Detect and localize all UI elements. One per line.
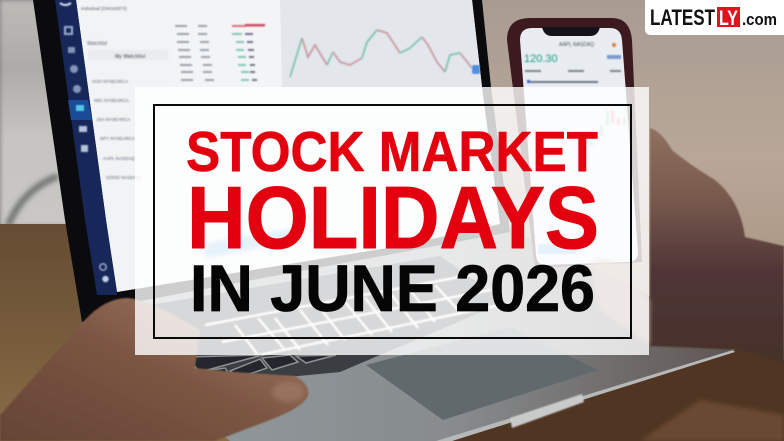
screen content behind panel: [203, 226, 304, 258]
title line 3: IN JUNE 2026: [190, 251, 595, 325]
title frame: [154, 105, 631, 338]
watchlist text: [81, 6, 168, 180]
laptop screen: [76, 0, 500, 292]
laptop front edge: [436, 350, 735, 441]
front latch: [510, 394, 584, 428]
wooden desk left: [0, 224, 260, 441]
watchlist text: Watchlist: [87, 41, 108, 47]
watchlist text: My Watchlist: [115, 54, 146, 60]
keyboard key gaps: [205, 275, 500, 358]
phone: [507, 18, 642, 268]
logo domain: .com: [742, 10, 777, 29]
wall background right: [480, 0, 784, 350]
wooden desk right: [450, 348, 784, 441]
logo red box: [717, 7, 740, 27]
title line 1: STOCK MARKET: [186, 120, 598, 184]
right hand: [650, 128, 784, 365]
keyboard dark: [150, 256, 505, 382]
watchlist text: DIA NYSEARCA: [97, 117, 130, 122]
phone candles: [590, 110, 626, 146]
laptop bezel: [33, 0, 510, 322]
laptop base deck: [118, 225, 733, 441]
watchlist text: VOO NYSEARCA: [92, 79, 128, 84]
chair curve: [8, 176, 58, 226]
keys visible below panel: [186, 355, 336, 381]
phone button: [538, 244, 576, 254]
sidebar icons: [60, 3, 109, 282]
price table rows: [175, 24, 265, 81]
left hand: [0, 298, 308, 441]
logo word: LATEST: [650, 5, 715, 30]
trackpad: [366, 327, 598, 420]
phone screen: [520, 28, 638, 265]
watchlist text: GOOG NASDAQ: [106, 175, 141, 180]
watchlist text: AAPL NASDAQ: [103, 156, 135, 161]
watchlist text: SPY NYSEARCA: [100, 136, 135, 141]
phone notch: [542, 27, 600, 36]
phone header text: AAPL NASDAQ: [559, 42, 594, 48]
title line 2: HOLIDAYS: [187, 168, 599, 267]
blue chart marker: [472, 65, 480, 74]
logo LY: LY: [719, 7, 738, 30]
phone header text: [524, 42, 621, 83]
fingertip highlight: [272, 382, 304, 402]
stock price line chart: [290, 30, 472, 77]
watchlist text: IWC NYSEARCA: [94, 98, 129, 103]
phone header text: 120.30: [524, 53, 558, 65]
active sidebar item: [68, 100, 92, 120]
phone body: [507, 18, 642, 268]
wall background left: [0, 0, 110, 226]
sidebar navy: [55, 0, 117, 295]
chart pane background: [280, 0, 482, 87]
logo badge: LatestLY.com: [645, 0, 784, 35]
watchlist text: Individual (DW192873): [81, 6, 127, 11]
thumb through panel: [590, 259, 650, 345]
panel: translucent white title card: [135, 87, 649, 355]
